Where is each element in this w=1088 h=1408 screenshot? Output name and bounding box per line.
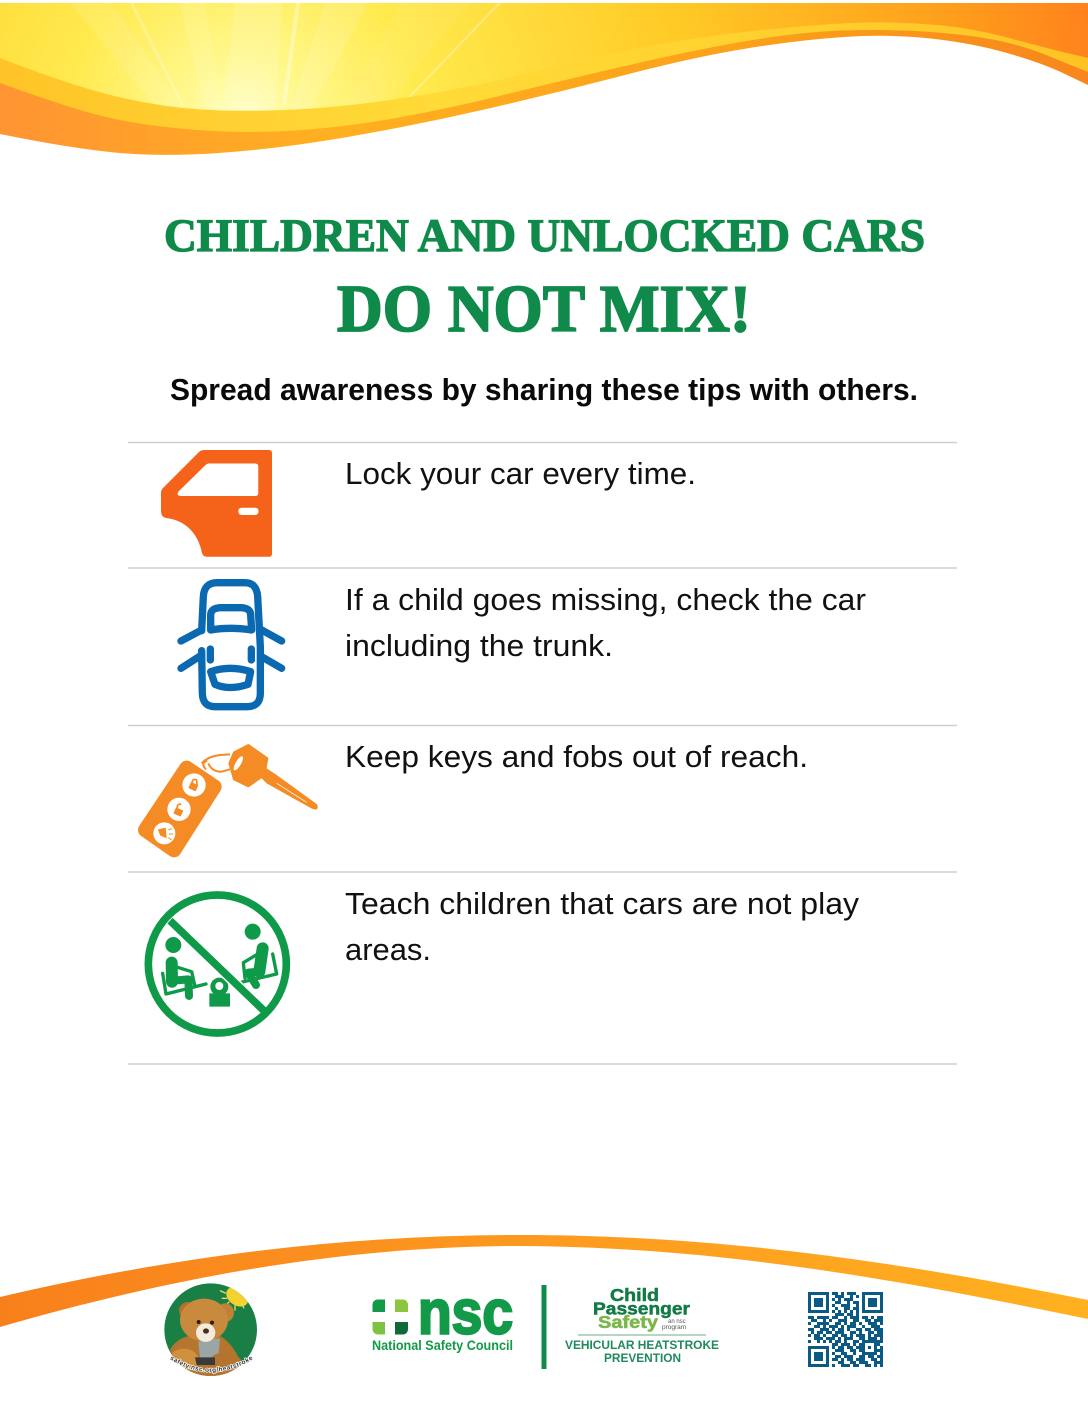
icon: no playing seesaw	[148, 895, 286, 1033]
subtitle: Spread awareness by sharing these tips with others.	[170, 372, 918, 407]
tip text: including the trunk.	[345, 628, 613, 663]
bottom orange arc	[0, 1235, 1088, 1327]
title line: CHILDREN AND UNLOCKED CARS	[164, 210, 925, 262]
badge url text: safety.nsc.org/heatstroke	[170, 1356, 252, 1374]
tip row 3: keys and fobs	[145, 739, 808, 850]
nsc wordmark: nsc	[418, 1278, 513, 1348]
logo divider	[542, 1285, 546, 1369]
tip text: Keep keys and fobs out of reach.	[345, 739, 808, 774]
tip row 4: not play areas	[148, 886, 860, 1033]
title emphasis line: DO NOT MIX!	[337, 272, 751, 346]
tip text: areas.	[345, 932, 431, 967]
icon: key and fob	[145, 745, 318, 850]
tip text: If a child goes missing, check the car	[345, 582, 866, 617]
logo: Child Passenger Safety	[565, 1285, 719, 1365]
logo: National Safety Council	[372, 1278, 513, 1353]
tip row 2: check the car	[181, 582, 866, 707]
tip text	[345, 886, 860, 967]
tip text	[345, 582, 866, 663]
tip text: Lock your car every time.	[345, 456, 696, 491]
logo: Child Passenger Safety: Safety	[598, 1312, 658, 1332]
tip row 1: lock your car	[161, 450, 696, 557]
QR code	[808, 1294, 883, 1366]
icon: car with open doors	[181, 583, 282, 707]
top sunburst wave banner	[0, 3, 1088, 155]
logo: Child Passenger Safety: Child	[610, 1285, 659, 1305]
organization name: National Safety Council	[372, 1338, 513, 1353]
logo: Child Passenger Safety: VEHICULAR HEATSTROKE	[565, 1340, 719, 1352]
tip text: Teach children that cars are not play	[345, 886, 860, 921]
logo: Child Passenger Safety: Passenger	[593, 1298, 690, 1318]
icon: sun	[220, 1288, 248, 1311]
logo: Child Passenger Safety: an nsc	[668, 1319, 686, 1325]
icon: cross squares	[372, 1300, 408, 1334]
logo: Child Passenger Safety: program	[662, 1324, 686, 1331]
logo: Child Passenger Safety: PREVENTION	[604, 1353, 681, 1365]
badge: teddy bear in car seat	[164, 1283, 257, 1376]
icon: car door	[161, 450, 272, 557]
